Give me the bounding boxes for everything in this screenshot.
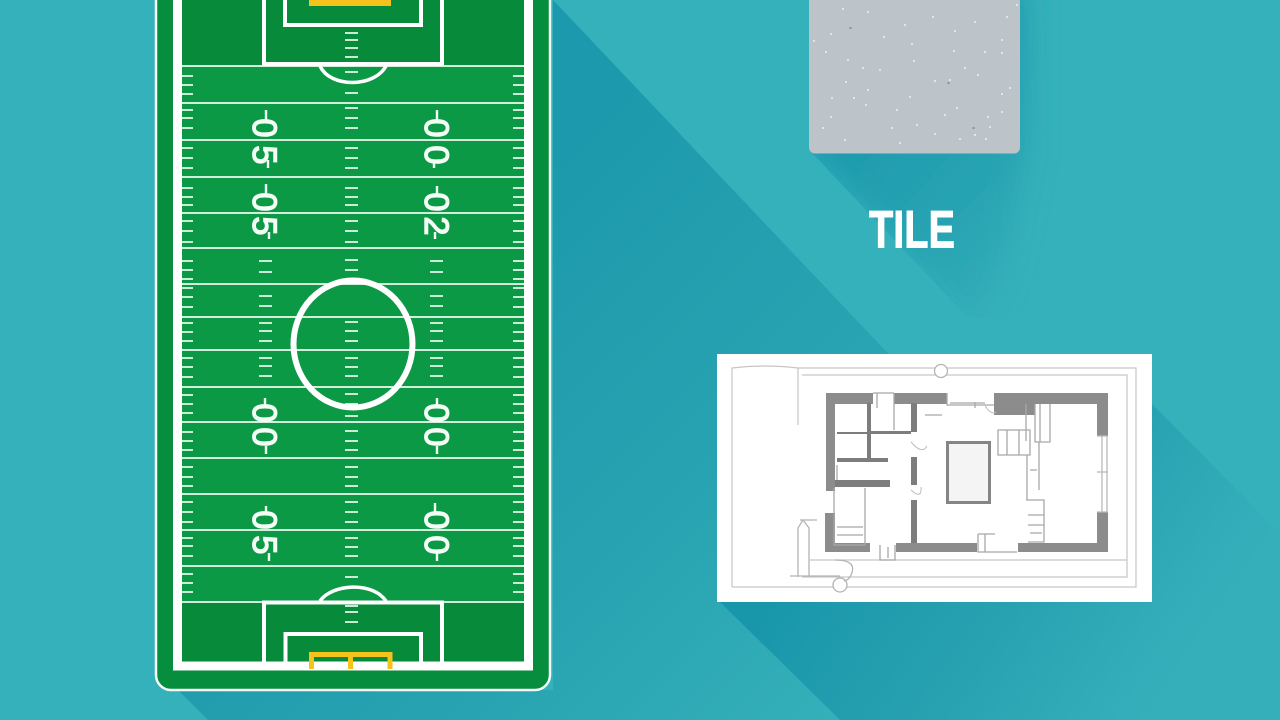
tile dark flecks xyxy=(850,28,974,128)
top goal xyxy=(309,0,391,6)
field base xyxy=(156,0,550,690)
door swings xyxy=(911,405,996,494)
football field xyxy=(156,0,550,690)
yard numbers: 0 xyxy=(417,146,455,164)
yard numbers: 0 xyxy=(245,428,283,446)
floor plan xyxy=(717,354,1152,602)
end zone: bottom xyxy=(178,602,528,664)
yard numbers: 0 xyxy=(245,404,283,422)
yard numbers: 0 xyxy=(417,511,455,529)
site outline xyxy=(732,366,1136,587)
end zone: top xyxy=(178,0,528,66)
yard lines xyxy=(182,66,524,602)
long shadow: floor plan xyxy=(720,404,1280,720)
long shadow: tile xyxy=(812,0,1034,291)
side hash marks xyxy=(182,76,524,592)
bottom goal xyxy=(312,654,390,669)
yard numbers xyxy=(245,110,455,561)
top penalty area xyxy=(264,0,442,64)
centre room xyxy=(948,442,990,502)
field boundary xyxy=(178,0,528,666)
inner hash marks xyxy=(259,261,443,376)
yard numbers: 0 xyxy=(417,119,455,137)
exterior walls xyxy=(825,393,1108,552)
yard numbers: 0 xyxy=(245,511,283,529)
plan markers xyxy=(790,364,948,592)
yard numbers: 5 xyxy=(245,217,283,235)
yard numbers: 5 xyxy=(245,146,283,164)
yard numbers: 0 xyxy=(417,428,455,446)
window panes xyxy=(1097,436,1108,512)
top penalty arc xyxy=(320,66,386,82)
tile speckles xyxy=(814,5,1017,143)
yard numbers: 0 xyxy=(417,404,455,422)
yard numbers: 2 xyxy=(417,217,455,235)
plan sheet xyxy=(717,354,1152,602)
tile sample xyxy=(809,0,1020,154)
long shadow: field xyxy=(178,0,900,720)
centre hash marks xyxy=(345,33,358,622)
yard numbers: 0 xyxy=(417,536,455,554)
fixtures and thin partitions xyxy=(834,393,1050,560)
bottom penalty arc xyxy=(320,587,386,601)
tile slab xyxy=(809,0,1020,154)
yard numbers: 0 xyxy=(245,119,283,137)
interior walls xyxy=(835,403,917,543)
stems xyxy=(265,110,437,561)
bottom penalty area xyxy=(264,602,442,664)
tile label: TILE xyxy=(869,200,955,260)
yard numbers: 5 xyxy=(245,536,283,554)
yard numbers: 0 xyxy=(417,193,455,211)
yard numbers: 0 xyxy=(245,193,283,211)
centre circle xyxy=(294,280,412,408)
field playing area xyxy=(178,66,528,602)
